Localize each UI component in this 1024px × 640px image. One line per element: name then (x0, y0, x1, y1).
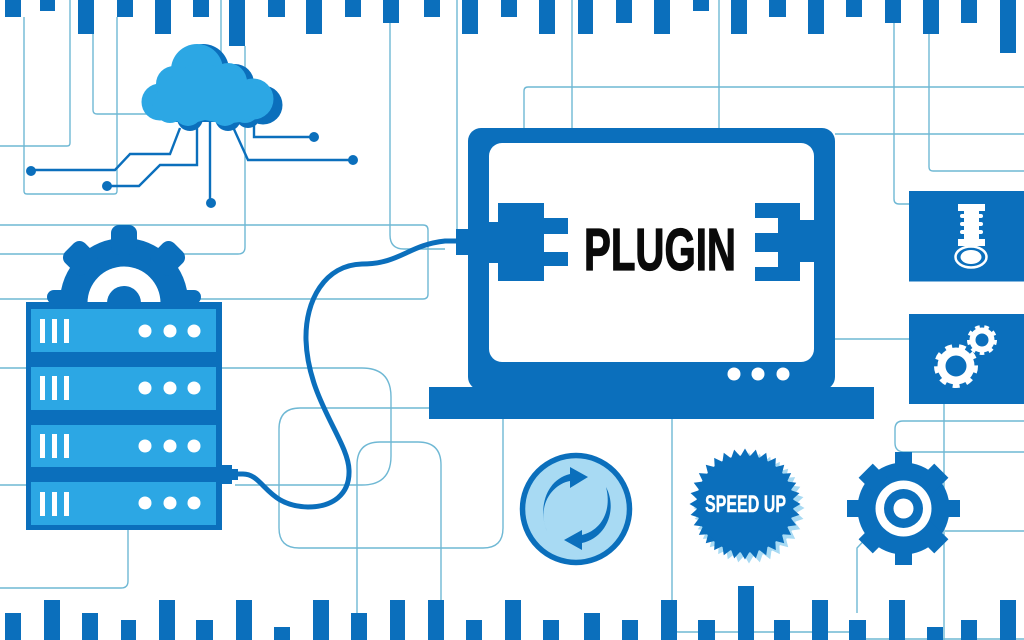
cloud shadow (170, 44, 282, 131)
icon: refresh (522, 456, 630, 562)
refresh arrows (543, 467, 611, 550)
laptop screen (489, 143, 814, 362)
left plug (456, 203, 568, 281)
top bar pattern (5, 0, 1016, 53)
cloud network icon (26, 44, 358, 208)
laptop base (429, 387, 874, 419)
laptop indicator dots (728, 368, 790, 380)
cable connecting server to laptop (222, 241, 458, 507)
server rows (31, 309, 216, 525)
badge label: SPEED UP (705, 491, 786, 518)
cloud wires (26, 122, 358, 208)
speed up badge (690, 448, 804, 564)
server gear (47, 225, 201, 366)
icon: zipper (956, 204, 986, 268)
badge star (690, 448, 800, 560)
plugin label: PLUGIN (584, 217, 736, 283)
icon: two cogs (936, 327, 995, 386)
bottom bar pattern (5, 586, 1016, 640)
server rack (26, 302, 222, 530)
laptop frame (468, 128, 835, 390)
panel: zip file (909, 191, 1024, 282)
laptop (429, 128, 874, 419)
icon: large gear (847, 452, 960, 565)
cloud body (142, 44, 274, 126)
right socket (755, 203, 815, 281)
server status lights (138, 324, 200, 510)
badge shadow (694, 452, 804, 564)
server slots (40, 319, 69, 516)
panel: settings (909, 314, 1024, 404)
